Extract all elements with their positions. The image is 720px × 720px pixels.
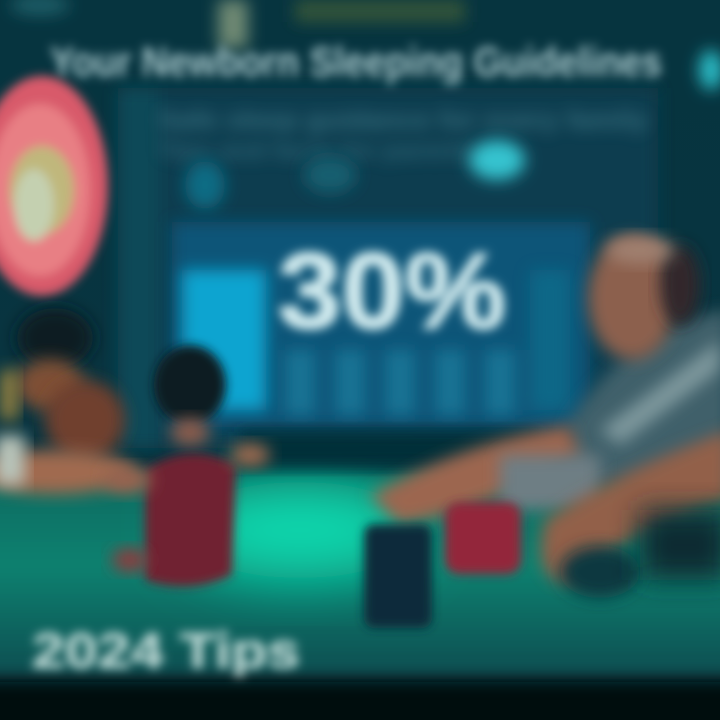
dark cup xyxy=(364,524,432,628)
dark band at panel foot xyxy=(240,432,540,466)
bottom dark strip xyxy=(0,682,720,720)
cyan accent dots xyxy=(185,50,720,209)
subtitle text block xyxy=(158,107,649,163)
figure: left child xyxy=(0,308,135,494)
subtitle text block: Safe sleep guidance for every family xyxy=(158,107,649,134)
top decoration xyxy=(10,0,465,48)
back panel xyxy=(118,88,658,448)
red cup xyxy=(445,502,521,574)
big percentage: 30% xyxy=(278,230,506,351)
bottom caption: 2024 Tips xyxy=(32,623,300,679)
subtitle text block: Tips and facts for parents xyxy=(158,138,478,163)
green table xyxy=(0,474,720,679)
bright cyan block xyxy=(182,270,266,410)
target icon xyxy=(0,76,108,296)
figure: middle child xyxy=(104,345,270,586)
figure: man xyxy=(370,236,720,598)
chart bars xyxy=(285,270,570,415)
blue chart panel xyxy=(172,222,590,427)
